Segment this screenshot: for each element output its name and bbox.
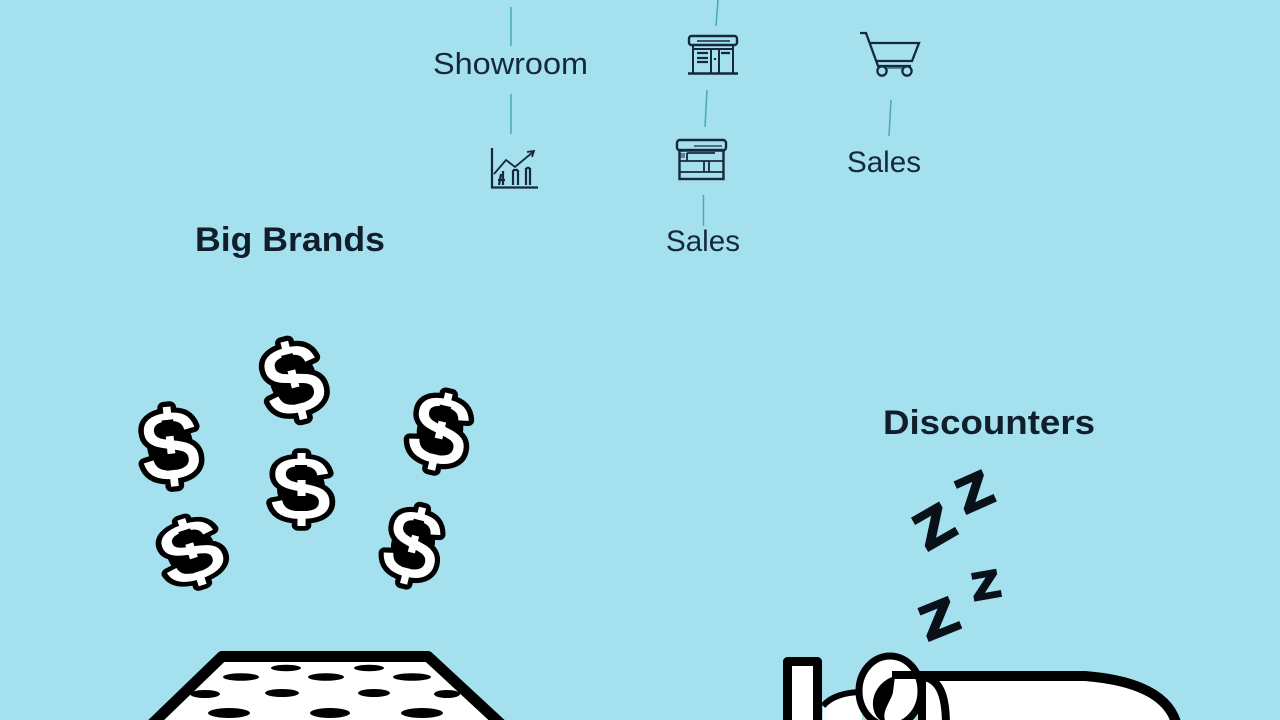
icon: Z lower right: Z xyxy=(968,562,1003,608)
icon: dollar centre: $ xyxy=(272,439,330,538)
icon: dollar lower right: $ xyxy=(374,488,451,603)
label: Showroom: Showroom xyxy=(433,46,588,81)
icon: discount storefront xyxy=(677,140,726,179)
heading: Discounters: Discounters xyxy=(883,404,1095,442)
icon: Z upper right: Z xyxy=(948,460,1001,523)
icon: dollar right: $ xyxy=(400,372,479,489)
icon: dollar top: $ xyxy=(253,322,334,440)
icon: dollar right: $ xyxy=(400,372,479,489)
icon: dollar left: $ xyxy=(136,388,204,502)
icon: dollar left: $ xyxy=(136,388,204,502)
label: Sales (right): Sales xyxy=(847,146,921,179)
icon: dollar lower left: $ xyxy=(149,499,234,606)
icon: growth chart xyxy=(492,148,538,188)
icon: Z upper left: Z xyxy=(904,492,964,561)
label: Sales (centre): Sales xyxy=(666,225,740,258)
icon: shopping cart xyxy=(860,33,919,76)
icon: dollar top: $ xyxy=(253,322,334,440)
money: floating dollar signs xyxy=(136,322,479,606)
icon: showroom storefront xyxy=(688,36,738,74)
mattress with dollar spots xyxy=(150,656,503,720)
bed with sleeping figure xyxy=(788,656,1177,720)
icon: dollar lower left: $ xyxy=(149,499,234,606)
icon: Z lower left: Z xyxy=(912,587,966,651)
icon: dollar centre: $ xyxy=(272,439,330,538)
icon: dollar lower right: $ xyxy=(374,488,451,603)
heading: Big Brands: Big Brands xyxy=(195,221,385,259)
sleep: Z letters xyxy=(904,460,1003,651)
